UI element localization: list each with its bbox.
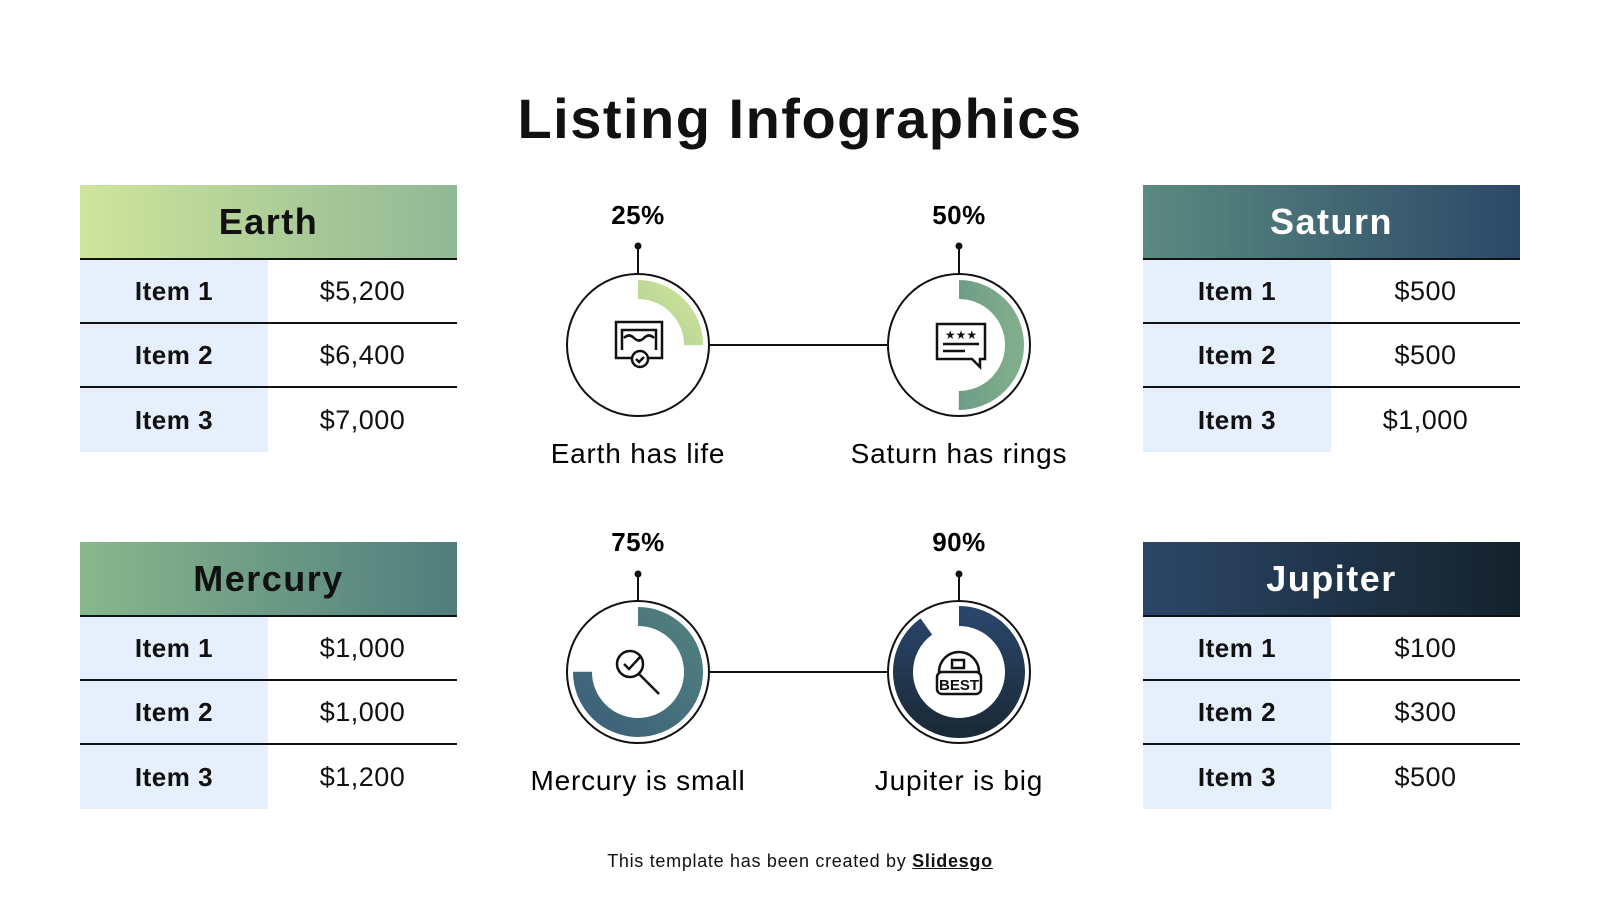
donut: Mercury 75%: Mercury is small bbox=[530, 765, 746, 796]
table: Saturn bbox=[1143, 185, 1520, 452]
table: Saturn: $500 bbox=[1394, 340, 1457, 370]
donut: Saturn 50%: Saturn has rings bbox=[851, 438, 1067, 469]
donut: Jupiter 90%: 90% bbox=[932, 527, 986, 557]
table: Jupiter: Item 2 bbox=[1198, 696, 1276, 726]
icon: best badge: BEST bbox=[939, 677, 979, 694]
icon: review bbox=[937, 324, 985, 367]
donut: Earth 25%: Earth has life bbox=[551, 438, 725, 469]
table: Saturn: Item 3 bbox=[1198, 404, 1276, 434]
table: Earth: Earth bbox=[219, 200, 318, 242]
table: Mercury: $1,200 bbox=[320, 762, 405, 792]
table: Mercury: Item 3 bbox=[135, 762, 213, 792]
donut: Mercury 75% bbox=[530, 527, 746, 796]
table: Saturn: Item 2 bbox=[1198, 340, 1276, 370]
icon: best badge bbox=[937, 652, 981, 694]
connector lines bbox=[709, 345, 888, 672]
table: Mercury: $1,000 bbox=[320, 632, 405, 662]
table: Saturn: Saturn bbox=[1270, 200, 1393, 242]
table: Jupiter: Item 3 bbox=[1198, 762, 1276, 792]
table: Jupiter: $100 bbox=[1394, 632, 1457, 662]
donut: Earth 25% bbox=[551, 200, 725, 469]
icon: review: ★★★ bbox=[945, 328, 977, 342]
table: Jupiter bbox=[1143, 542, 1520, 809]
table: Mercury: $1,000 bbox=[320, 696, 405, 726]
icon: search check bbox=[617, 651, 659, 694]
table: Earth: Item 2 bbox=[135, 340, 213, 370]
donut: Mercury 75%: 75% bbox=[611, 527, 665, 557]
table: Saturn: Item 1 bbox=[1198, 276, 1276, 306]
table: Saturn: $500 bbox=[1394, 276, 1457, 306]
table: Mercury: Item 2 bbox=[135, 696, 213, 726]
donut: Jupiter 90%: Jupiter is big bbox=[875, 765, 1043, 796]
table: Jupiter: Jupiter bbox=[1266, 558, 1397, 598]
table: Saturn: $1,000 bbox=[1383, 404, 1468, 434]
table: Earth: $7,000 bbox=[320, 404, 405, 434]
icon: certificate bbox=[616, 322, 662, 367]
table: Earth: $5,200 bbox=[320, 276, 405, 306]
table: Earth bbox=[80, 185, 457, 452]
table: Mercury: Mercury bbox=[193, 558, 344, 598]
table: Earth: Item 3 bbox=[135, 404, 213, 434]
footer: This template has been created by Slidesgo bbox=[607, 851, 993, 871]
table: Mercury: Item 1 bbox=[135, 632, 213, 662]
donut: Jupiter 90% bbox=[875, 527, 1043, 796]
donut: Saturn 50%: 50% bbox=[932, 200, 986, 230]
donut: Earth 25%: 25% bbox=[611, 200, 665, 230]
donut: Saturn 50% bbox=[851, 200, 1067, 469]
table: Earth: Item 1 bbox=[135, 276, 213, 306]
table: Earth: $6,400 bbox=[320, 340, 405, 370]
title: Listing Infographics bbox=[517, 87, 1083, 150]
table: Jupiter: Item 1 bbox=[1198, 632, 1276, 662]
table: Jupiter: $300 bbox=[1394, 696, 1457, 726]
table: Mercury bbox=[80, 542, 457, 809]
table: Jupiter: $500 bbox=[1394, 762, 1457, 792]
